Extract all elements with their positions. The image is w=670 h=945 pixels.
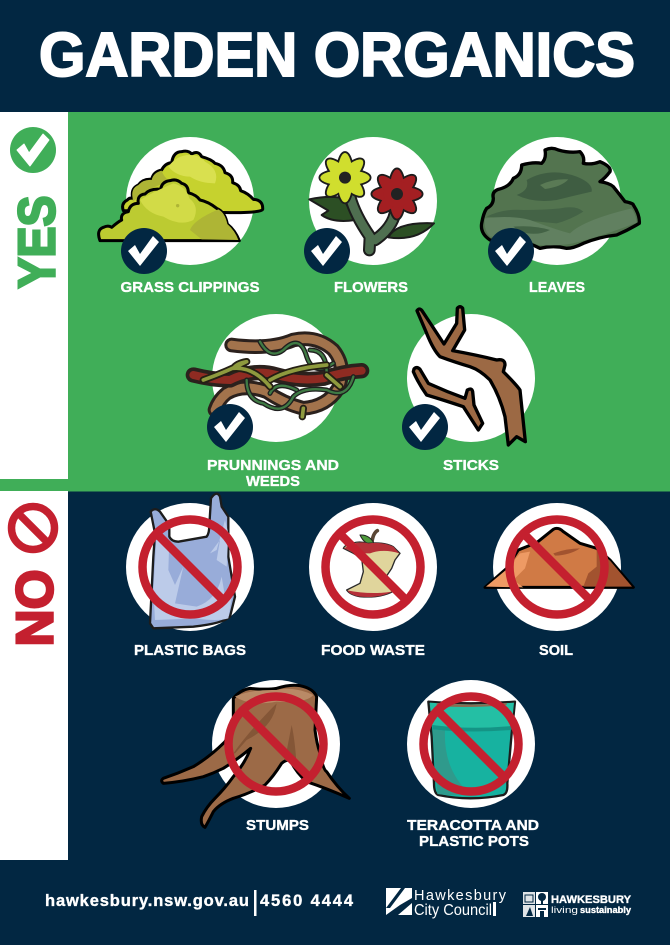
item: food waste <box>309 503 437 659</box>
icon: grass piles <box>99 151 263 241</box>
panel: no background <box>68 492 670 860</box>
icon: prohibition sign <box>510 520 604 614</box>
panel: yes background <box>68 112 670 492</box>
icon: apple core <box>343 531 400 597</box>
icon: prohibition sign <box>326 520 420 614</box>
badge: tick <box>121 228 167 274</box>
label: LEAVES <box>529 279 585 296</box>
label: STICKS <box>443 457 499 474</box>
label: FOOD WASTE <box>321 642 425 659</box>
badge: tick <box>402 404 448 450</box>
item: leaves <box>481 137 639 296</box>
label line two: WEEDS <box>246 473 300 490</box>
divider strip <box>0 479 68 491</box>
item: teracotta and plastic pots <box>407 680 539 850</box>
logo: hawkesbury living sustainably <box>523 892 632 917</box>
icon: leaf pile <box>481 148 639 248</box>
footer: phone: 4560 4444 <box>260 892 354 910</box>
logo: hawkesbury living sustainably: living <box>551 905 578 915</box>
icon: pot <box>428 702 515 798</box>
heading: no: NO <box>6 570 64 646</box>
icon: yes tick <box>10 127 56 173</box>
item: prunings and weeds <box>193 314 362 490</box>
badge: tick <box>488 228 534 274</box>
item: sticks <box>402 307 535 474</box>
icon: prohibition sign <box>142 520 238 614</box>
logo: hawkesbury city council: City Council <box>414 902 492 919</box>
logo: hawkesbury city council <box>386 888 507 919</box>
item: plastic bags <box>126 494 254 659</box>
header band <box>0 0 670 112</box>
heading: yes: YES <box>8 196 66 288</box>
icon: tree stump <box>162 685 349 827</box>
icon: soil pile <box>485 528 633 587</box>
label: GRASS CLIPPINGS <box>120 279 260 296</box>
item: stumps <box>162 680 349 834</box>
footer: website: hawkesbury.nsw.gov.au <box>45 892 249 910</box>
logo: hawkesbury living sustainably: HAWKESBURY <box>551 894 632 906</box>
label: PLASTIC BAGS <box>134 642 246 659</box>
label: TERACOTTA AND <box>407 817 539 834</box>
item: soil <box>485 503 633 659</box>
label: STUMPS <box>246 817 309 834</box>
item: grass clippings <box>99 137 263 296</box>
icon: sticks <box>413 307 525 445</box>
logo: hawkesbury living sustainably: sustainably <box>580 905 631 915</box>
badge: tick <box>207 404 253 450</box>
label line two: PLASTIC POTS <box>419 833 529 850</box>
icon: prohibition sign <box>228 696 324 792</box>
label: SOIL <box>539 642 573 659</box>
badge: tick <box>304 228 350 274</box>
logo: hawkesbury city council: Hawkesbury <box>414 888 507 904</box>
footer: divider <box>254 890 256 916</box>
icon: tangled branches <box>193 339 362 417</box>
icon: plastic bag <box>150 494 235 628</box>
icon: no symbol <box>12 506 54 550</box>
title: GARDEN ORGANICS <box>39 21 635 90</box>
item: flowers <box>304 137 437 296</box>
footer band <box>0 860 670 945</box>
icon: prohibition sign <box>424 696 518 792</box>
label: FLOWERS <box>334 279 408 296</box>
label: PRUNNINGS AND <box>207 457 339 474</box>
icon: flowers <box>309 153 434 250</box>
